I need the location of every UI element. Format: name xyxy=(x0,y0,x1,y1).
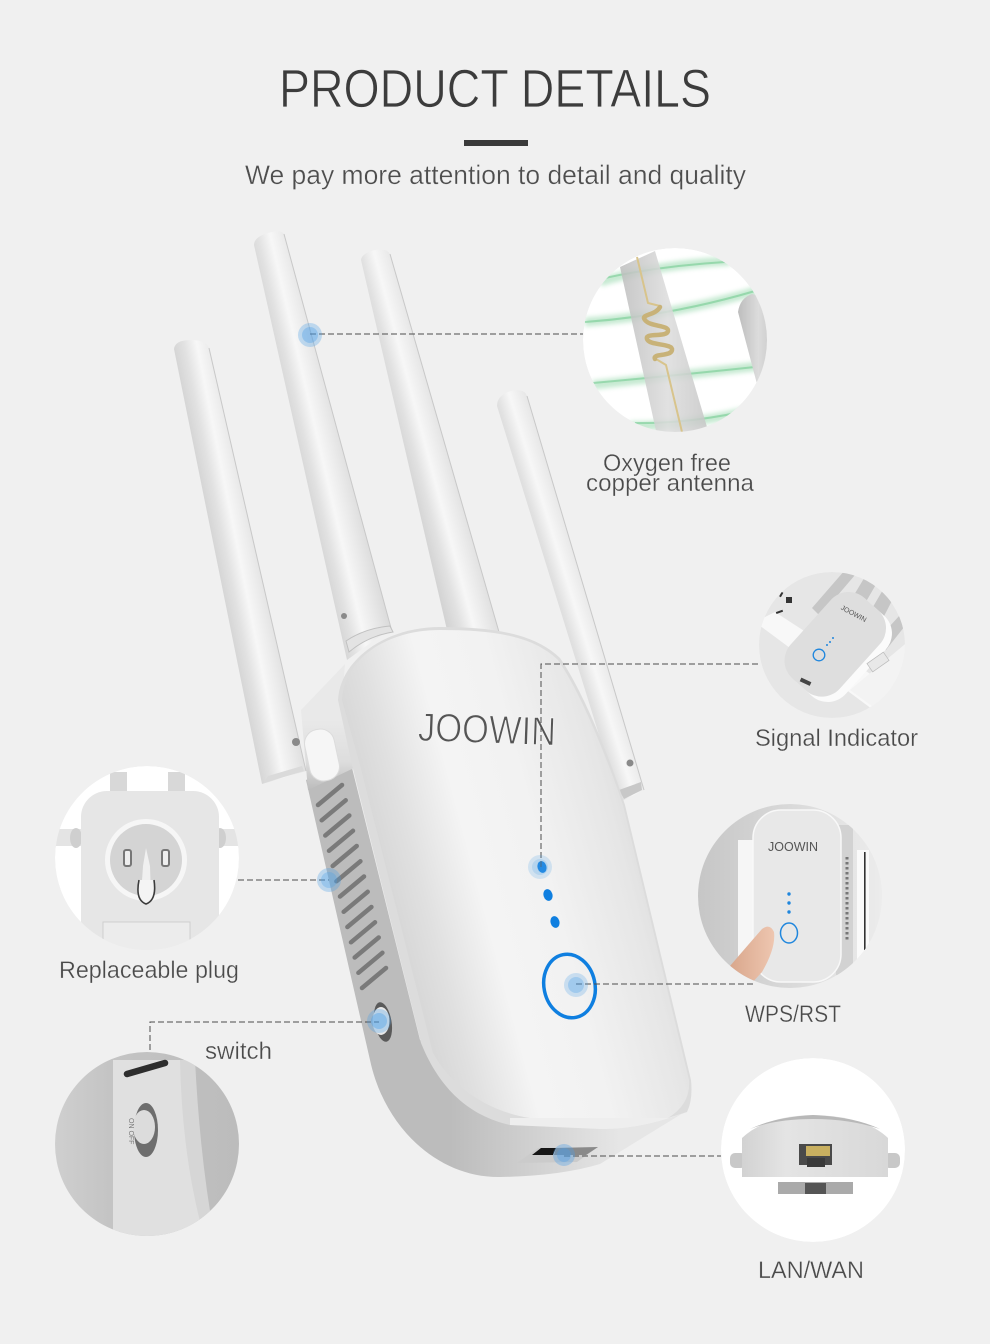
right antenna xyxy=(857,850,869,960)
detail: replaceable plug xyxy=(55,766,239,940)
detail: signal indicator xyxy=(755,570,910,718)
copper coil xyxy=(644,307,672,359)
signal LEDs xyxy=(536,860,561,929)
outlet holes xyxy=(776,592,792,614)
body rim xyxy=(338,627,692,1129)
antenna hinge xyxy=(302,726,342,784)
device logo: JOOWIN xyxy=(768,840,818,854)
antenna cross-section xyxy=(620,251,707,450)
left antenna xyxy=(738,840,752,956)
detail: switch xyxy=(55,1052,239,1240)
label sticker xyxy=(867,652,889,672)
device LEDs xyxy=(787,892,791,914)
right antenna xyxy=(497,390,644,802)
bottom connector xyxy=(778,1182,853,1194)
plug body xyxy=(81,791,219,939)
earth clip xyxy=(142,848,150,880)
side joints xyxy=(70,828,226,848)
switch button xyxy=(133,1110,155,1144)
label: oxygen free copper antenna: copper antenna xyxy=(586,470,755,497)
detail: WPS button xyxy=(698,804,882,988)
right vents xyxy=(846,857,848,942)
body side and vent panel xyxy=(306,760,688,1177)
mini device xyxy=(788,593,892,702)
rear antenna two xyxy=(254,231,393,660)
device ring xyxy=(780,923,798,943)
copper wire xyxy=(637,257,682,432)
top antenna stubs xyxy=(110,772,185,791)
on off marking: ON OFF xyxy=(127,1118,134,1144)
label: WPS/RST: WPS/RST xyxy=(745,1001,841,1028)
detail: antenna xyxy=(583,248,767,432)
mini port xyxy=(800,678,811,686)
body front face xyxy=(342,630,689,1118)
rear antenna three xyxy=(361,250,499,632)
upper-left shoulder xyxy=(301,664,354,790)
mini LEDs xyxy=(826,637,834,646)
side switch xyxy=(371,1001,395,1043)
logo: JOOWIN xyxy=(417,706,557,754)
antennas xyxy=(812,570,908,650)
socket pins xyxy=(124,850,169,866)
finger xyxy=(730,927,774,985)
vent slots xyxy=(318,785,386,988)
label: signal indicator: Signal Indicator xyxy=(755,725,918,752)
device side panel xyxy=(180,1060,210,1219)
second antenna xyxy=(738,294,767,382)
detail: LAN port xyxy=(721,1058,905,1242)
subtitle: We pay more attention to detail and quality xyxy=(245,160,746,190)
vent slot xyxy=(127,1063,165,1074)
right side panel xyxy=(836,825,853,975)
label: replaceable plug: Replaceable plug xyxy=(59,957,239,984)
lower front lip xyxy=(510,1112,687,1129)
product details infographic xyxy=(55,70,918,1278)
LAN port xyxy=(517,1147,598,1163)
connector lines xyxy=(150,334,759,1156)
hotspot markers xyxy=(298,323,588,1166)
green signal bands xyxy=(585,261,760,426)
socket xyxy=(105,819,187,901)
bottom label area xyxy=(102,922,190,940)
WPS ring button xyxy=(538,949,601,1023)
mini logo: JOOWIN xyxy=(839,605,867,624)
side antennas xyxy=(55,829,240,846)
label: switch: switch xyxy=(205,1038,272,1065)
mini ring xyxy=(813,649,825,661)
RJ45 socket xyxy=(799,1144,832,1165)
title: PRODUCT DETAILS xyxy=(279,59,711,119)
device body xyxy=(753,810,841,982)
switch slot xyxy=(134,1103,158,1157)
label: oxygen free copper antenna: Oxygen free xyxy=(603,450,731,477)
device base xyxy=(742,1115,888,1177)
repeater device xyxy=(174,231,692,1177)
wall socket plate xyxy=(762,612,872,708)
left antenna xyxy=(174,340,306,784)
side ears xyxy=(730,1153,900,1168)
title underline bar xyxy=(464,140,528,146)
label: LAN/WAN: LAN/WAN xyxy=(758,1257,864,1284)
label: oxygen free copper antenna xyxy=(586,450,755,497)
